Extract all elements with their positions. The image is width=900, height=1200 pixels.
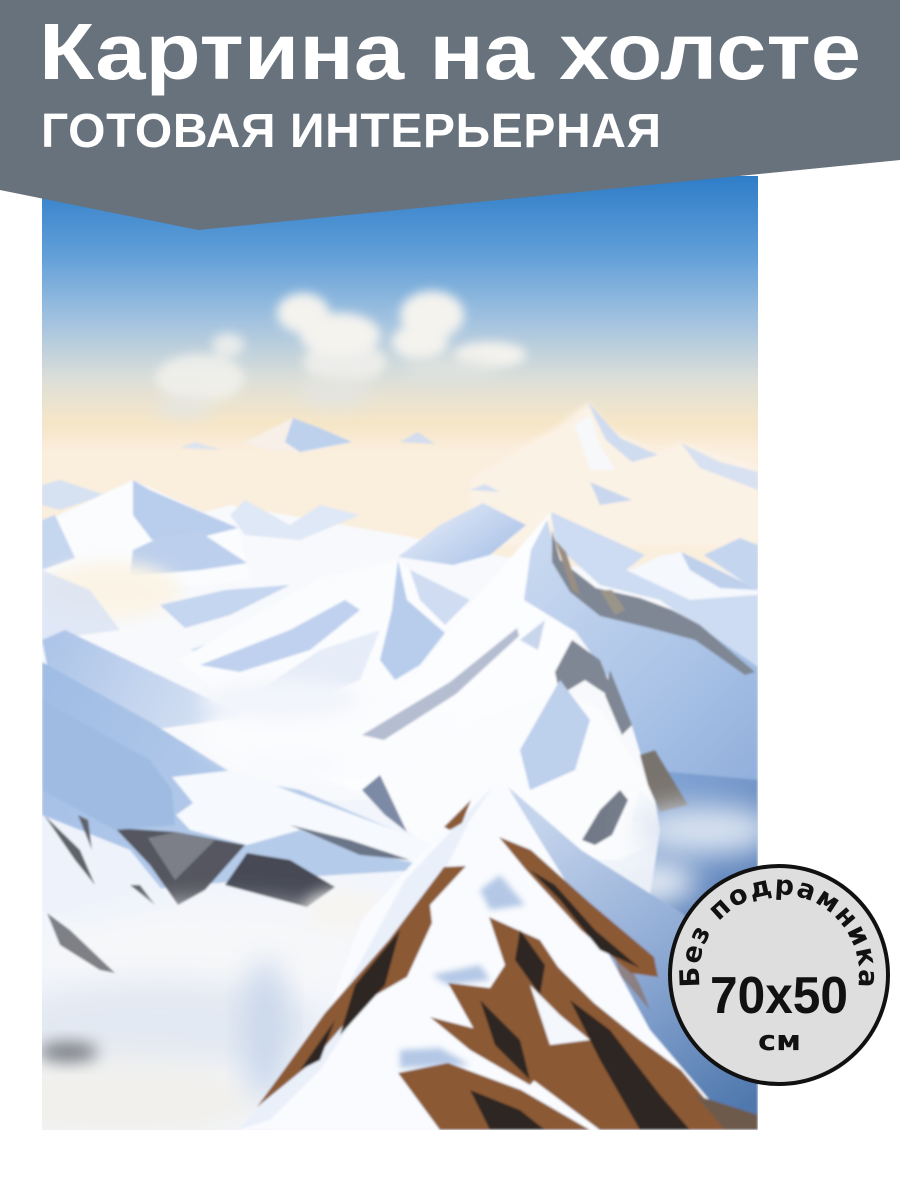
subtitle: ГОТОВАЯ ИНТЕРЬЕРНАЯ (41, 105, 661, 158)
brown rocks (257, 800, 758, 1130)
ridge streaks (362, 620, 610, 741)
main cliff (524, 520, 758, 810)
badge: size without stretcher (668, 864, 890, 1086)
foreground peak (238, 785, 758, 1130)
snow on rocks (530, 985, 590, 1045)
low clouds (42, 881, 370, 1130)
curved label: Без подрамника (679, 879, 874, 986)
lower cliff rocks (362, 670, 688, 845)
right blue flank (508, 787, 758, 1130)
dark rock streaks (300, 870, 690, 1130)
main cliff upper face (551, 512, 758, 670)
sky (42, 176, 758, 448)
clouds right (615, 806, 775, 902)
size number: 70x50 (710, 967, 848, 1025)
header banner (0, 0, 900, 230)
lower right snow (394, 738, 635, 858)
far haze (30, 440, 770, 570)
cliff rock band (552, 530, 755, 675)
right far domes (630, 538, 758, 591)
title: Картина на холсте (39, 7, 861, 96)
middle snow dome (196, 562, 470, 686)
far peaks (42, 402, 758, 545)
dome (398, 503, 526, 565)
left snow ridge and rocks (42, 740, 427, 908)
mid range (42, 504, 586, 576)
main ridge white face (511, 514, 550, 562)
left slope (42, 662, 430, 900)
left mountain (40, 480, 360, 655)
clouds (155, 291, 526, 420)
right back blue (650, 772, 758, 918)
snow shadows (400, 875, 525, 1068)
mid clouds (199, 684, 338, 722)
back left slope (42, 630, 222, 730)
unit: см (758, 1024, 801, 1057)
painting: snowy mountains (42, 176, 758, 1130)
